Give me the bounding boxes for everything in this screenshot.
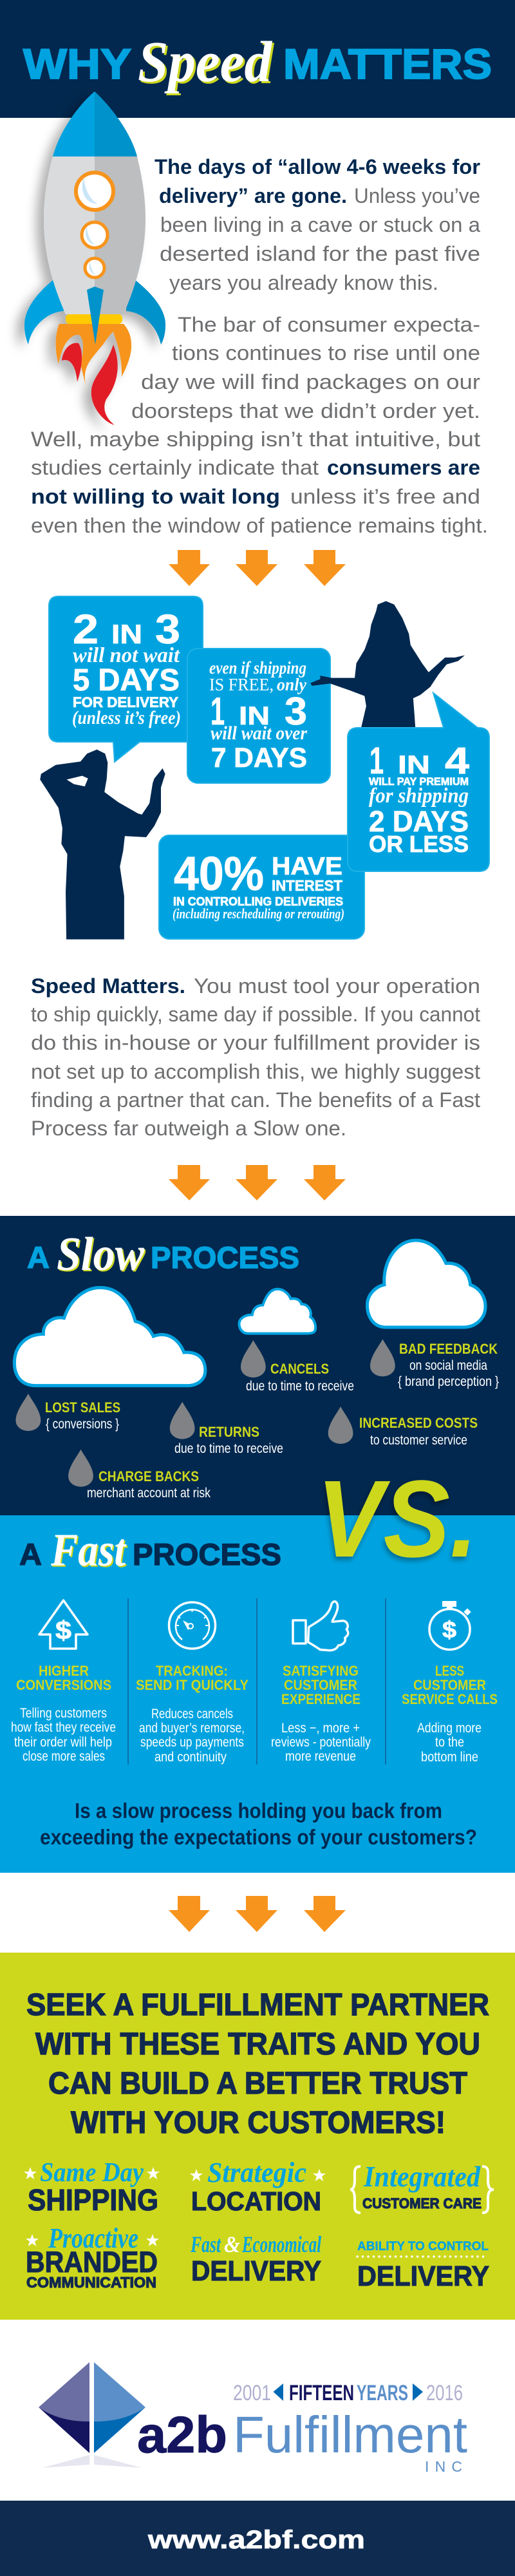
column: tracking: and continuity xyxy=(154,1750,227,1765)
speech bubble: 2 in 3 xyxy=(49,596,203,762)
heading: a fast process: Fast xyxy=(52,1526,128,1577)
column: less customer service calls: LESS xyxy=(435,1663,464,1679)
speech bubble: 1 in 4: WILL PAY PREMIUM xyxy=(369,775,469,788)
speech bubble: 2 in 3: 2 xyxy=(73,606,98,652)
text block: intro: Well, maybe shipping isn’t that intuitive, but xyxy=(31,428,480,451)
text block: speed matters: finding a partner that can. The benefits of a Fast xyxy=(31,1088,480,1112)
header band xyxy=(0,0,515,118)
labels: slow process effects: CHARGE BACKS xyxy=(98,1468,199,1484)
title: Speed xyxy=(140,32,275,96)
heading: seek a fulfillment partner: WITH YOUR CUSTOMERS! xyxy=(71,2106,445,2140)
column: higher conversions: CONVERSIONS xyxy=(16,1677,111,1693)
fifteen years badge: YEARS xyxy=(357,2381,408,2405)
speech bubble: 2 in 3: will not wait xyxy=(73,644,180,667)
speech bubble: 40 percent xyxy=(159,835,364,939)
speech bubble: 1 in 3: IN xyxy=(239,702,270,730)
heading: a fast process: A xyxy=(19,1537,42,1571)
heading: a slow process: PROCESS xyxy=(151,1240,299,1274)
column: less customer service calls: Adding more xyxy=(417,1721,482,1736)
clouds xyxy=(14,1240,485,1386)
logo: a2b fulfillment xyxy=(39,2362,467,2475)
column: satisfying customer experience: EXPERIENCE xyxy=(281,1691,360,1707)
question text: Is a slow process holding you back from xyxy=(75,1799,442,1823)
speech bubble: 2 in 3: IN xyxy=(111,619,142,649)
text block: speed matters: not set up to accomplish this, we highly suggest xyxy=(31,1060,480,1083)
text block: intro: The bar of consumer expecta- xyxy=(178,313,480,336)
column: satisfying customer experience: reviews - potentially xyxy=(271,1735,371,1750)
heading: seek a fulfillment partner: SEEK A FULFILLMENT PARTNER xyxy=(26,1988,489,2022)
wordmark: a2b xyxy=(137,2406,227,2463)
trait: integrated customer care: Integrated xyxy=(363,2160,481,2193)
trait: ability to control delivery: ABILITY TO CONTROL xyxy=(357,2240,489,2253)
column: less customer service calls: bottom line xyxy=(421,1750,478,1765)
column: satisfying customer experience: more revenue xyxy=(285,1749,356,1764)
column: tracking: speeds up payments xyxy=(140,1735,244,1750)
title xyxy=(23,30,492,96)
website url: www.a2bf.com xyxy=(147,2526,365,2554)
speech bubble: 1 in 4: IN xyxy=(398,751,430,779)
icon: speedometer xyxy=(169,1602,215,1649)
labels: slow process effects: INCREASED COSTS xyxy=(359,1415,478,1431)
question text: exceeding the expectations of your customers? xyxy=(40,1825,477,1849)
icon: dollar arrow xyxy=(39,1600,88,1649)
icon: rocket xyxy=(24,91,165,425)
trait: same day shipping xyxy=(24,2158,160,2217)
arrows: three down arrows xyxy=(169,550,346,586)
heading: a slow process: Slow xyxy=(58,1229,146,1282)
panel: fast process xyxy=(0,1515,515,1873)
labels: slow process effects: on social media xyxy=(409,1358,487,1373)
trait: fast and economical delivery: DELIVERY xyxy=(191,2255,321,2287)
silhouette: shrugging woman xyxy=(310,601,465,730)
speech bubble: 2 in 3: (unless it’s free) xyxy=(72,707,181,728)
speech bubble: 40 percent: IN CONTROLLING DELIVERIES xyxy=(173,895,343,908)
column: tracking xyxy=(136,1663,248,1765)
heading: a fast process xyxy=(19,1524,281,1577)
heading: a fast process: Fast xyxy=(50,1524,127,1576)
column: higher conversions: HIGHER xyxy=(39,1663,89,1679)
text block: intro: consumers are xyxy=(327,456,480,479)
panel: fulfillment partner traits xyxy=(0,1953,515,2320)
trait: fast and economical delivery: Fast xyxy=(190,2231,221,2257)
fifteen years badge xyxy=(233,2381,463,2405)
trait: proactive branded communication xyxy=(26,2222,159,2291)
text block: intro: not willing to wait long xyxy=(31,485,280,508)
labels: slow process effects: to customer service xyxy=(370,1433,467,1448)
column: higher conversions: how fast they receive xyxy=(11,1720,116,1735)
speech bubble: 2 in 3: FOR DELIVERY xyxy=(73,694,178,710)
speech bubble: 1 in 4: 1 xyxy=(370,740,384,782)
text block: intro: The days of “allow 4-6 weeks for xyxy=(154,155,480,178)
arrows: three down arrows xyxy=(169,1165,346,1200)
trait: fast and economical delivery xyxy=(190,2231,321,2287)
labels: slow process effects xyxy=(45,1341,499,1501)
title: MATTERS xyxy=(283,40,492,88)
speech bubble: 1 in 4: for shipping xyxy=(369,784,469,808)
column: less customer service calls: SERVICE CALLS xyxy=(402,1691,498,1707)
column: tracking: SEND IT QUICKLY xyxy=(136,1677,248,1693)
text block: intro: even then the window of patience remains tight. xyxy=(31,514,488,537)
footer band xyxy=(0,2501,515,2576)
trait: same day shipping: Same Day xyxy=(40,2158,144,2188)
text block: intro: day we will find packages on our xyxy=(141,370,480,393)
heading: a slow process: Slow xyxy=(57,1228,145,1281)
text block: intro: tions continues to rise until one xyxy=(172,341,480,365)
fifteen years badge: 2016 xyxy=(426,2381,463,2405)
speech bubble: 1 in 3: 3 xyxy=(285,690,307,733)
text block: intro: studies certainly indicate that xyxy=(31,456,319,479)
labels: slow process effects: merchant account at risk xyxy=(87,1486,211,1501)
speech bubble: 40 percent: (including rescheduling or rerouting) xyxy=(173,905,344,922)
speech bubble: 40 percent: 40% xyxy=(174,847,264,900)
trait: strategic location: LOCATION xyxy=(191,2186,321,2216)
icon: thumbs up xyxy=(293,1602,348,1651)
heading: seek a fulfillment partner xyxy=(26,1988,489,2140)
trait: integrated customer care xyxy=(350,2160,494,2213)
title: WHY xyxy=(23,40,131,88)
heading: seek a fulfillment partner: WITH THESE TRAITS AND YOU xyxy=(35,2027,480,2061)
text block: speed matters xyxy=(31,974,480,1140)
speech bubble: 1 in 3: will wait over xyxy=(211,723,307,744)
text block: speed matters: You must tool your operation xyxy=(194,974,480,998)
wordmark: INC xyxy=(425,2458,462,2475)
speech bubble: 2 in 3: 5 DAYS xyxy=(73,663,180,697)
speech bubble: 40 percent: INTEREST xyxy=(272,877,342,894)
vs mark: VS. xyxy=(317,1458,478,1580)
text block: intro: Unless you’ve xyxy=(354,184,480,207)
trait: proactive branded communication: BRANDED xyxy=(26,2246,158,2278)
panel: slow process xyxy=(0,1216,515,1515)
labels: slow process effects: { conversions } xyxy=(46,1417,119,1432)
fifteen years badge: FIFTEEN xyxy=(289,2381,354,2405)
trait: proactive branded communication: Proactive xyxy=(48,2222,138,2254)
column: tracking: Reduces cancels xyxy=(151,1707,233,1721)
trait: same day shipping: SHIPPING xyxy=(28,2183,158,2217)
speech bubble: 2 in 3: 3 xyxy=(155,606,180,652)
text block: intro: years you already know this. xyxy=(169,271,438,294)
column: satisfying customer experience xyxy=(271,1663,371,1764)
column: satisfying customer experience: SATISFYING xyxy=(283,1663,359,1679)
column: higher conversions: close more sales xyxy=(23,1749,105,1764)
trait: strategic location: Strategic xyxy=(207,2157,306,2188)
heading: a slow process xyxy=(27,1228,299,1282)
text block: intro: been living in a cave or stuck on a xyxy=(160,213,480,236)
trait: proactive branded communication: COMMUNICATION xyxy=(26,2274,156,2291)
icon: stopwatch: $ xyxy=(442,1616,456,1643)
speech bubble: 1 in 4: 4 xyxy=(445,740,469,782)
title: Speed xyxy=(138,30,273,94)
labels: slow process effects: { brand perception } xyxy=(398,1374,499,1389)
column: tracking: and buyer’s remorse, xyxy=(139,1721,245,1736)
icon: stopwatch xyxy=(429,1601,471,1650)
trait: strategic location xyxy=(190,2157,326,2216)
speech bubble: 1 in 3: 7 DAYS xyxy=(211,743,307,773)
column: less customer service calls xyxy=(402,1663,498,1765)
column: higher conversions xyxy=(11,1663,116,1764)
trait: fast and economical delivery: & xyxy=(224,2231,240,2257)
speech bubble: 1 in 3: 1 xyxy=(211,690,225,733)
column: higher conversions: Telling customers xyxy=(20,1706,107,1721)
question text xyxy=(40,1799,477,1849)
speech bubble: 1 in 4: OR LESS xyxy=(369,831,469,857)
text block: speed matters: Speed Matters. xyxy=(31,974,185,998)
speech bubble: 1 in 3 xyxy=(187,649,330,783)
arrows: three down arrows xyxy=(169,1896,346,1932)
text block: intro: doorsteps that we didn’t order yet. xyxy=(131,399,480,422)
speech bubble: 40 percent: HAVE xyxy=(272,853,342,880)
text block: intro: unless it’s free and xyxy=(290,485,480,508)
labels: slow process effects: CANCELS xyxy=(270,1361,329,1377)
column: less customer service calls: CUSTOMER xyxy=(413,1677,486,1693)
speech bubble: 1 in 4 xyxy=(348,693,489,871)
labels: slow process effects: RETURNS xyxy=(199,1424,259,1440)
wordmark: Fulfillment xyxy=(233,2406,467,2463)
trait: ability to control delivery xyxy=(357,2240,489,2292)
labels: slow process effects: LOST SALES xyxy=(45,1399,120,1416)
column: satisfying customer experience: CUSTOMER xyxy=(284,1677,357,1693)
text block: intro: deserted island for the past five xyxy=(160,242,480,265)
silhouette: thinking man xyxy=(40,750,165,940)
heading: a fast process: PROCESS xyxy=(133,1537,281,1571)
column: satisfying customer experience: Less −, more + xyxy=(281,1721,360,1736)
speech bubble: 1 in 3: IS FREE, xyxy=(209,675,274,694)
logo mark: diamond xyxy=(39,2362,145,2468)
icon: dollar arrow: $ xyxy=(55,1616,71,1645)
speech bubble: 1 in 4: 2 DAYS xyxy=(369,805,469,838)
text block: intro xyxy=(31,155,488,537)
labels: slow process effects: due to time to receive xyxy=(246,1379,354,1394)
text block: intro: delivery” are gone. xyxy=(159,184,347,207)
speech bubble: 1 in 3: even if shipping xyxy=(209,658,306,677)
column dividers xyxy=(127,1598,386,1765)
text block: speed matters: to ship quickly, same day if possible. If you cannot xyxy=(31,1003,480,1026)
column: higher conversions: their order will help xyxy=(14,1735,112,1750)
column: less customer service calls: to the xyxy=(435,1735,464,1750)
fifteen years badge: 2001 xyxy=(233,2381,271,2405)
column: tracking: TRACKING: xyxy=(156,1663,228,1679)
text block: speed matters: Process far outweigh a Slow one. xyxy=(31,1117,346,1140)
trait: fast and economical delivery: Economical xyxy=(241,2231,321,2257)
text block: speed matters: do this in-house or your fulfillment provider is xyxy=(31,1031,480,1054)
heading: seek a fulfillment partner: CAN BUILD A BETTER TRUST xyxy=(48,2067,467,2101)
heading: a slow process: A xyxy=(27,1240,50,1274)
trait: integrated customer care: CUSTOMER CARE xyxy=(362,2195,482,2211)
wordmark xyxy=(137,2406,467,2475)
speech bubble: 1 in 3: only xyxy=(277,675,307,694)
trait: ability to control delivery: DELIVERY xyxy=(357,2260,489,2292)
rain drops xyxy=(15,1339,395,1487)
labels: slow process effects: due to time to receive xyxy=(174,1441,283,1456)
labels: slow process effects: BAD FEEDBACK xyxy=(399,1341,498,1357)
